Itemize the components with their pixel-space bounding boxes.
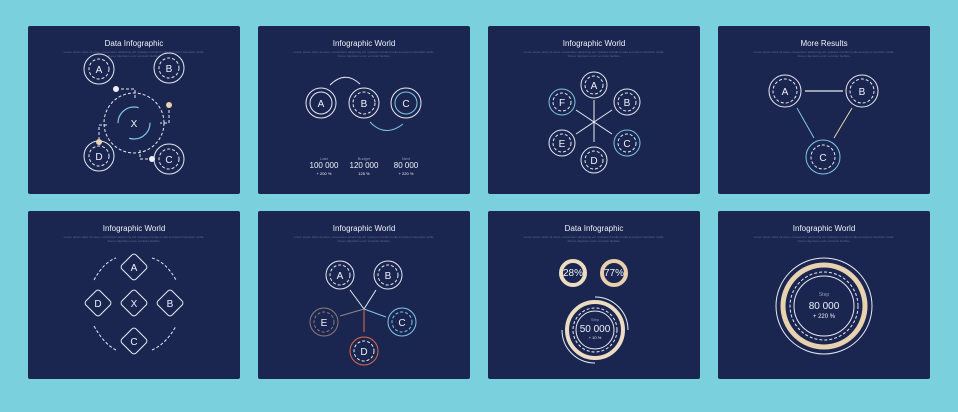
text block: Donec dignissim enim vel dolor facilisis. xyxy=(338,54,391,58)
text block: Donec dignissim enim vel dolor facilisis. xyxy=(798,239,851,243)
diagram: six nodes: C xyxy=(623,139,631,150)
diagram: A B C D around X: A xyxy=(96,65,103,76)
text block xyxy=(754,50,895,58)
text block: Lorem ipsum dolor sit amet, consectetur adipiscing elit. Quisque tincidunt nulla sed ipsum hendrerit mollis. xyxy=(64,50,205,54)
diagram: six nodes: F xyxy=(559,98,565,109)
heading: Infographic World xyxy=(333,39,395,48)
text block xyxy=(524,235,665,243)
heading: Infographic World xyxy=(103,224,165,233)
diagram: five nodes with arrows: E xyxy=(321,318,328,329)
chart: big ring with value: Step xyxy=(819,292,829,298)
diagram: A B C circles with arrows xyxy=(306,77,421,131)
chart: big ring: + 10 % xyxy=(589,335,602,340)
text block xyxy=(294,50,435,58)
text block: Donec dignissim enim vel dolor facilisis. xyxy=(568,54,621,58)
text block: Lorem ipsum dolor sit amet, consectetur adipiscing elit. Quisque tincidunt nulla sed ipsum hendrerit mollis. xyxy=(294,50,435,54)
text block: Donec dignissim enim vel dolor facilisis. xyxy=(798,54,851,58)
text block xyxy=(64,235,205,243)
diagram: five nodes with arrows: B xyxy=(385,271,392,282)
chart: ring 28%: 28% xyxy=(563,268,583,279)
panel: data infographic rings xyxy=(488,211,700,379)
diagram: six nodes: B xyxy=(624,98,631,109)
panel: infographic world ABC flow xyxy=(258,26,470,194)
diagram: A B C D around X: X xyxy=(131,119,138,130)
diagram: diamonds: A xyxy=(131,263,138,274)
diagram: diamonds: X xyxy=(131,299,138,310)
panel: infographic world diamonds xyxy=(28,211,240,379)
text block: Lorem ipsum dolor sit amet, consectetur adipiscing elit. Quisque tincidunt nulla sed ipsum hendrerit mollis. xyxy=(524,50,665,54)
stats: Last xyxy=(320,156,329,161)
diagram: five nodes with arrows: C xyxy=(398,318,406,329)
text block: Lorem ipsum dolor sit amet, consectetur adipiscing elit. Quisque tincidunt nulla sed ipsum hendrerit mollis. xyxy=(754,50,895,54)
diagram: A B C circles with arrows: B xyxy=(361,99,368,110)
heading: More Results xyxy=(800,39,848,48)
text block xyxy=(64,50,205,58)
diagram: A B C D around X xyxy=(84,53,184,174)
diagram: six nodes: D xyxy=(590,156,598,167)
panel: infographic world big ring xyxy=(718,211,930,379)
text block: Donec dignissim enim vel dolor facilisis. xyxy=(108,239,161,243)
text block: Lorem ipsum dolor sit amet, consectetur adipiscing elit. Quisque tincidunt nulla sed ipsum hendrerit mollis. xyxy=(754,235,895,239)
panel: data infographic X xyxy=(28,26,240,194)
diagram: diamonds xyxy=(84,253,184,355)
diagram: diamonds: B xyxy=(167,299,174,310)
diagram: A B C D around X: C xyxy=(165,155,173,166)
heading: Infographic World xyxy=(793,224,855,233)
diagram: A B C D around X: B xyxy=(166,64,173,75)
chart: ring 77% xyxy=(602,261,626,285)
diagram: triangle: C xyxy=(819,153,827,164)
heading: Infographic World xyxy=(333,224,395,233)
stats xyxy=(310,156,419,176)
diagram: triangle: A xyxy=(782,87,789,98)
stats: Budget xyxy=(358,156,371,161)
chart: big ring with value: + 220 % xyxy=(813,314,836,320)
diagram: five nodes with arrows xyxy=(310,261,416,365)
text block xyxy=(524,50,665,58)
diagram: six nodes xyxy=(549,72,640,173)
stats: 100 000 xyxy=(310,161,339,170)
text block: Donec dignissim enim vel dolor facilisis. xyxy=(338,239,391,243)
panel: infographic world hexagon xyxy=(488,26,700,194)
stats: + 220 % xyxy=(399,171,414,176)
heading: Data Infographic xyxy=(565,224,623,233)
chart: big ring with value xyxy=(776,258,872,354)
stats: + 200 % xyxy=(317,171,332,176)
diagram: triangle xyxy=(769,75,878,174)
text block: Donec dignissim enim vel dolor facilisis. xyxy=(568,239,621,243)
chart: big ring: 50 000 xyxy=(580,324,611,335)
chart: ring 77%: 77% xyxy=(604,268,624,279)
chart: big ring with value: 80 000 xyxy=(809,301,840,312)
diagram: diamonds: D xyxy=(94,299,102,310)
diagram: six nodes: A xyxy=(591,81,598,92)
diagram: triangle: B xyxy=(859,87,866,98)
stats: 120 000 xyxy=(350,161,379,170)
text block xyxy=(754,235,895,243)
heading: Data Infographic xyxy=(105,39,163,48)
diagram: five nodes with arrows: A xyxy=(337,271,344,282)
stats: 125 % xyxy=(358,171,370,176)
diagram: six nodes: E xyxy=(559,139,566,150)
text block: Lorem ipsum dolor sit amet, consectetur adipiscing elit. Quisque tincidunt nulla sed ipsum hendrerit mollis. xyxy=(64,235,205,239)
diagram: diamonds: C xyxy=(130,337,138,348)
chart: big ring: Step xyxy=(591,317,600,322)
stats: 80 000 xyxy=(394,161,419,170)
text block: Lorem ipsum dolor sit amet, consectetur adipiscing elit. Quisque tincidunt nulla sed ipsum hendrerit mollis. xyxy=(524,235,665,239)
chart: big ring xyxy=(562,297,628,363)
heading: Infographic World xyxy=(563,39,625,48)
stats: Next xyxy=(402,156,411,161)
diagram: A B C D around X: D xyxy=(95,152,103,163)
diagram: five nodes with arrows: D xyxy=(360,347,368,358)
text block: Donec dignissim enim vel dolor facilisis. xyxy=(108,54,161,58)
text block: Lorem ipsum dolor sit amet, consectetur adipiscing elit. Quisque tincidunt nulla sed ipsum hendrerit mollis. xyxy=(294,235,435,239)
diagram: A B C circles with arrows: A xyxy=(318,99,325,110)
panel: infographic world radial arrows xyxy=(258,211,470,379)
text block xyxy=(294,235,435,243)
diagram: A B C circles with arrows: C xyxy=(402,99,410,110)
panel: more results triangle xyxy=(718,26,930,194)
chart: ring 28% xyxy=(561,261,585,285)
